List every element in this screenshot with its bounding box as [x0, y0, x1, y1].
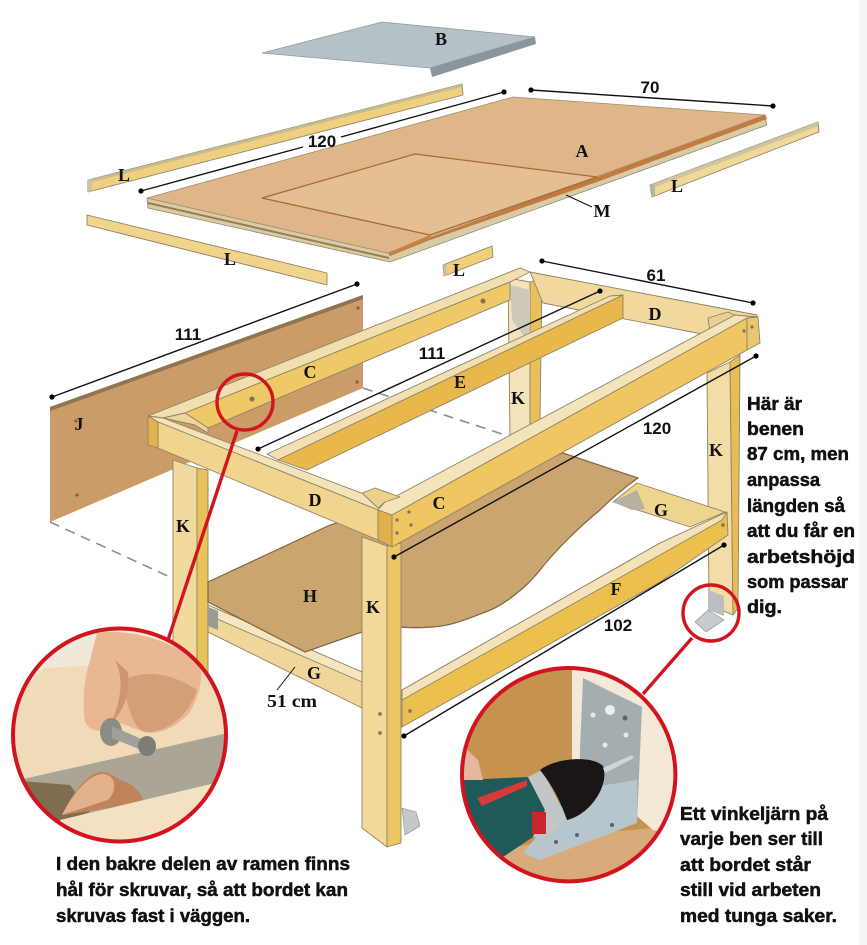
dimension line 111 inner: 111: [419, 344, 445, 363]
caption: angle bracket: med tunga saker.: [680, 906, 837, 926]
part letters: D: [648, 304, 662, 324]
dimension line 61: [539, 258, 756, 306]
dimension line 120 frame: 120: [643, 419, 671, 438]
caption: leg length: [747, 394, 855, 617]
connector line to right photo: [643, 638, 692, 694]
caption: angle bracket: att bordet står: [680, 855, 811, 875]
dimension line 111 inner: [255, 288, 603, 452]
part letters: A: [576, 141, 588, 161]
leg K left: [173, 460, 208, 690]
rail C rear: [148, 268, 530, 428]
caption: bolt holes: hål för skruvar, så att bordet kan: [56, 880, 348, 900]
dimension line 70: 70: [641, 78, 659, 97]
caption: leg length: längden så: [747, 496, 846, 516]
leader line for M: [566, 195, 592, 207]
dimension line 61: 61: [647, 266, 665, 285]
caption: bolt holes: I den bakre delen av ramen finns: [56, 854, 350, 874]
part letters: G: [307, 663, 321, 683]
part L: top left strip: [88, 84, 463, 192]
caption: leg length: arbetshöjd: [747, 547, 855, 567]
caption: leg length: benen: [747, 419, 804, 439]
rail D back: [530, 272, 757, 335]
caption: angle bracket: Ett vinkeljärn på: [680, 804, 829, 824]
rail G left: [208, 605, 362, 708]
part H: lower shelf: [208, 453, 638, 652]
part B: metal sheet: [262, 22, 536, 77]
caption: bolt holes: skruvas fast i väggen.: [56, 906, 250, 926]
dimension line 120 top: [138, 89, 507, 194]
caption: leg length: 87 cm, men: [747, 444, 849, 464]
part J: back panel: [50, 295, 363, 522]
dimension line 102: [401, 542, 727, 739]
part letters: H: [303, 586, 317, 606]
rail E: [267, 295, 623, 470]
dimension line 111 panel: 111: [175, 325, 201, 344]
part letters: E: [454, 372, 466, 392]
caption: leg length: anpassa: [747, 470, 821, 490]
part letters: B: [435, 29, 447, 49]
dimension line 120 frame: [391, 353, 759, 560]
dimension 51 cm with leader: 51 cm: [267, 691, 317, 711]
part letters: K: [709, 440, 723, 460]
dimension line 120 top: 120: [308, 132, 336, 151]
part L: short strip: [443, 246, 493, 276]
detail marker circle: bracket: [683, 585, 739, 641]
dimension 51 cm with leader: [267, 667, 317, 711]
part letters: C: [304, 362, 316, 382]
dimension line 70: [528, 78, 776, 109]
connector line to left photo: [168, 431, 237, 640]
photo circle: drill on bracket: [460, 665, 680, 885]
caption: leg length: dig.: [747, 597, 782, 617]
bracket at right leg: [695, 590, 724, 632]
caption: angle bracket: still vid arbeten: [680, 880, 821, 900]
dimension line 102: 102: [604, 616, 632, 635]
part letters: L: [118, 165, 130, 185]
part letters: M: [594, 201, 610, 221]
part letters: L: [671, 176, 683, 196]
part letters: L: [224, 249, 236, 269]
part letters: K: [176, 516, 190, 536]
part letters: K: [366, 597, 380, 617]
part letters: F: [610, 579, 622, 599]
detail marker circle: rear rail: [217, 374, 273, 430]
caption: bolt holes: [56, 854, 350, 926]
part A and M: table top board: [147, 97, 767, 262]
photo circle: bolt through frame: [10, 625, 230, 850]
dimension line 111 panel: [49, 281, 360, 400]
caption: leg length: att du får en: [747, 521, 855, 541]
caption: leg length: Här är: [747, 394, 802, 414]
leg K back: [508, 278, 542, 438]
rail C front: [362, 315, 760, 547]
part letters: J: [74, 414, 84, 434]
bracket at front leg: [402, 808, 420, 835]
rail D front: [148, 413, 385, 540]
rail F: [402, 512, 728, 727]
caption: leg length: som passar: [747, 572, 848, 592]
leg K right: [707, 312, 745, 615]
part letters: K: [511, 388, 525, 408]
part letters: G: [654, 500, 668, 520]
part letters: L: [453, 260, 465, 280]
leg K front: [362, 537, 401, 847]
rail G right: [613, 483, 725, 527]
caption: angle bracket: varje ben ser till: [680, 829, 823, 849]
dashed guide lines: [50, 388, 508, 578]
part L: right strip: [650, 122, 819, 197]
part letters: D: [308, 490, 322, 510]
caption: angle bracket: [680, 804, 837, 926]
part letters: [74, 29, 723, 683]
part letters: C: [432, 493, 446, 513]
part L: lower left strip: [87, 215, 327, 285]
